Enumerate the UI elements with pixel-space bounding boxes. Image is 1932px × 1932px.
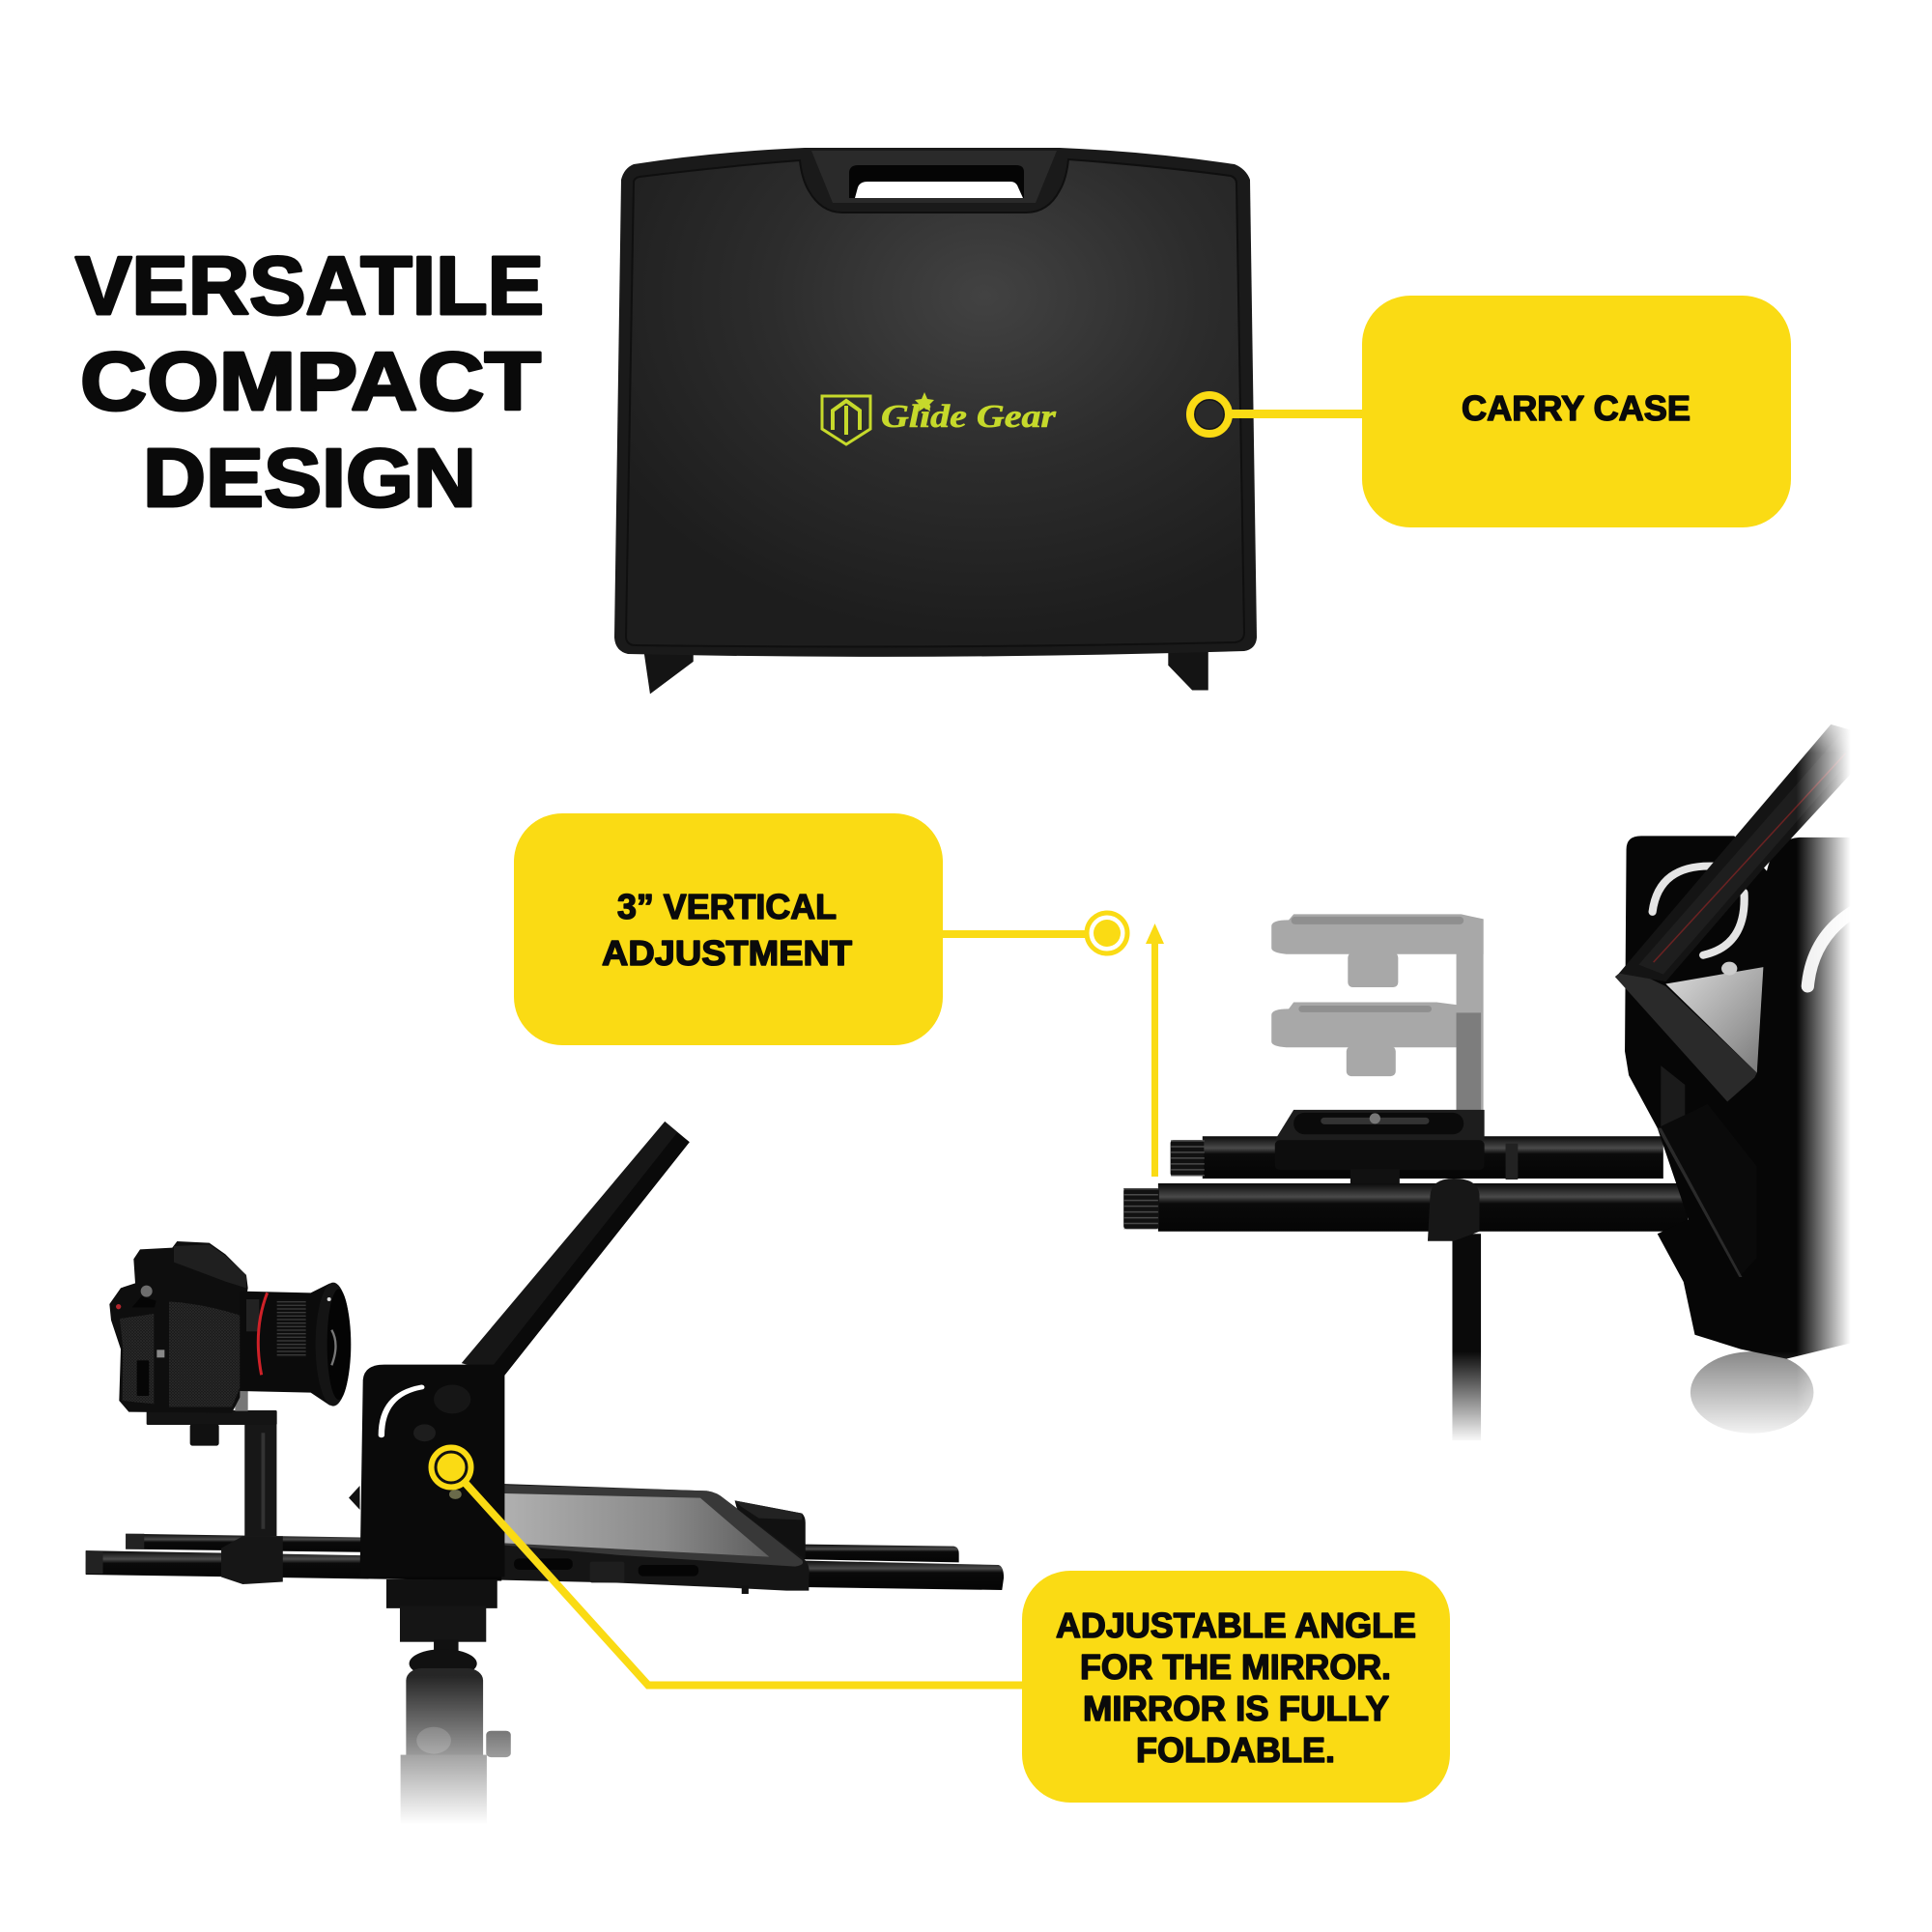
case feet xyxy=(643,650,1208,694)
callout: carry case: CARRY CASE xyxy=(1462,388,1690,428)
label box xyxy=(1362,296,1791,527)
teleprompter close-up photo xyxy=(1123,691,1880,1464)
lens barrel xyxy=(240,1283,330,1406)
teleprompter body xyxy=(1625,836,1865,1359)
marker dot xyxy=(1087,913,1127,953)
label box xyxy=(514,813,943,1045)
leader line xyxy=(1227,410,1367,418)
rear rod xyxy=(1203,1136,1663,1179)
leader line xyxy=(937,930,1087,938)
bracket plate and knob xyxy=(147,1410,277,1425)
case handle opening xyxy=(849,165,1024,198)
tablet body xyxy=(472,1483,810,1591)
title: COMPACT xyxy=(80,336,541,428)
post xyxy=(1452,1234,1481,1440)
rear rod xyxy=(126,1534,501,1554)
rear rod right end xyxy=(786,1544,959,1562)
camera xyxy=(109,1241,351,1446)
front rod right end xyxy=(780,1560,1004,1590)
title: VERSATILE xyxy=(75,241,544,332)
front rod xyxy=(1158,1183,1688,1232)
carry case photo xyxy=(614,148,1257,694)
callout: vertical adjustment: 3” VERTICAL xyxy=(617,887,837,926)
callout: vertical adjustment: ADJUSTMENT xyxy=(602,933,852,973)
callout: adjustable mirror xyxy=(430,1446,1450,1803)
tripod head xyxy=(386,1579,497,1608)
label box xyxy=(1022,1571,1450,1803)
tablet ports xyxy=(514,1558,573,1570)
title xyxy=(75,241,544,525)
rod clamp xyxy=(1428,1179,1480,1241)
grip texture xyxy=(169,1301,240,1407)
tablet frame xyxy=(490,1485,803,1567)
right-edge fade xyxy=(1797,691,1851,1464)
case body xyxy=(614,148,1257,657)
mirror glass xyxy=(1665,967,1763,1073)
leader line xyxy=(451,1467,1029,1685)
angle slot xyxy=(382,1387,421,1435)
callout: vertical adjustment xyxy=(514,813,1127,1045)
marker dot xyxy=(430,1446,472,1489)
callout: adjustable mirror: FOR THE MIRROR. xyxy=(1080,1647,1391,1687)
mirror strap xyxy=(462,1122,690,1376)
mirror arm xyxy=(1619,724,1865,981)
camera bracket xyxy=(244,1411,276,1536)
glide gear logo xyxy=(822,392,1057,444)
front rod xyxy=(86,1550,501,1581)
case lid panel xyxy=(626,159,1244,646)
mirror frame xyxy=(1615,967,1757,1101)
slot arcs xyxy=(1653,867,1715,912)
case handle recess xyxy=(811,151,1057,203)
marker dot xyxy=(1190,395,1229,434)
lower fade xyxy=(1436,1351,1870,1443)
callout: carry case xyxy=(1190,296,1791,527)
lens hood xyxy=(316,1283,351,1406)
arrow: vertical travel xyxy=(1146,923,1164,1177)
top housing xyxy=(174,1244,246,1288)
tripod ball xyxy=(1690,1351,1813,1434)
callout: adjustable mirror: FOLDABLE. xyxy=(1136,1730,1335,1770)
camera body xyxy=(109,1241,248,1413)
ghost bracket positions xyxy=(1271,914,1484,1111)
callout: adjustable mirror: ADJUSTABLE ANGLE xyxy=(1056,1605,1416,1645)
glide gear logo: Glide Gear xyxy=(881,399,1057,435)
teleprompter with camera photo xyxy=(86,1122,1004,1838)
side plate xyxy=(360,1365,504,1577)
callout: adjustable mirror: MIRROR IS FULLY xyxy=(1083,1689,1389,1728)
title: DESIGN xyxy=(143,433,476,525)
tablet clamp xyxy=(735,1500,806,1558)
mounted plate xyxy=(1275,1110,1485,1140)
tablet screen xyxy=(503,1493,769,1557)
top fade xyxy=(1772,691,1870,753)
